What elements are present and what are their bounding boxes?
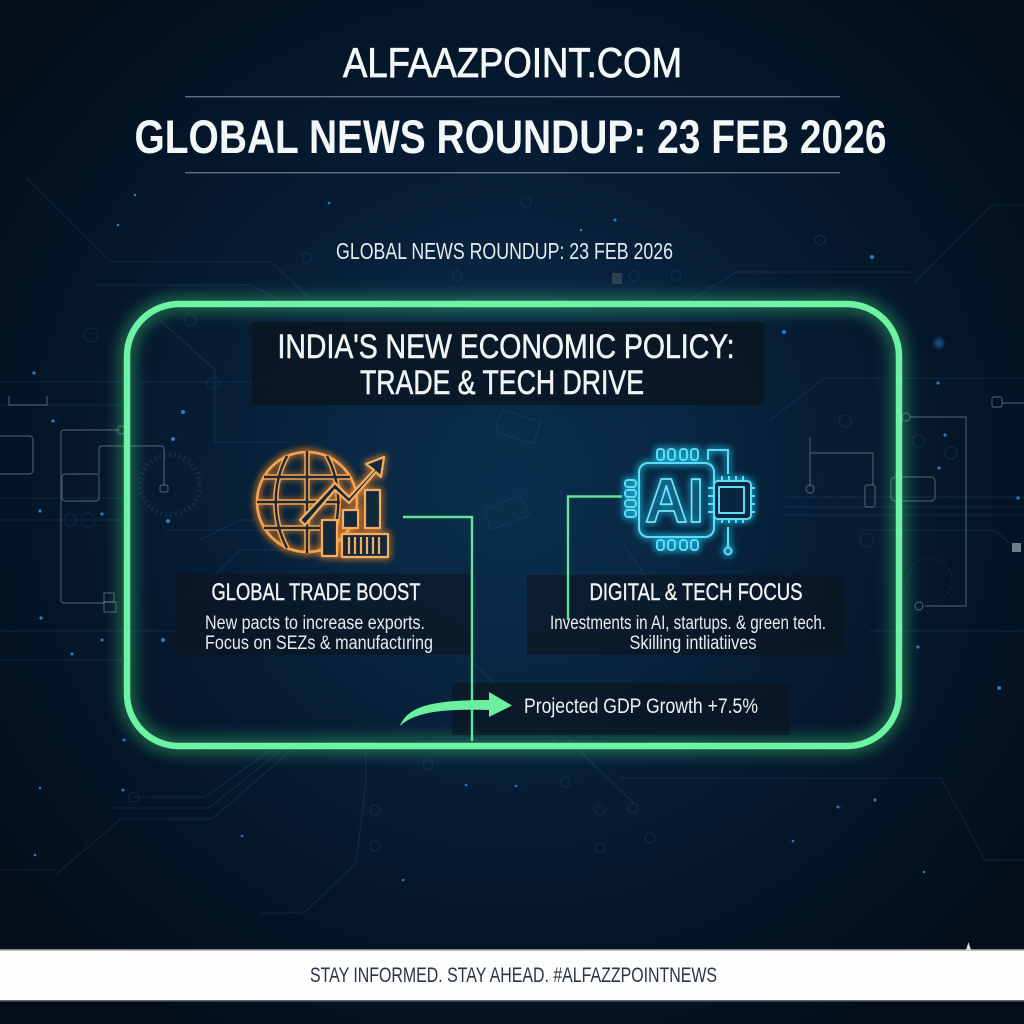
footer band: STAY INFORMED. STAY AHEAD. #ALFAZZPOINTNEWS (310, 964, 717, 987)
callout: projected GDP growth (452, 683, 790, 735)
panel heading: INDIA'S NEW ECONOMIC POLICY: (278, 328, 734, 366)
header rule bottom (185, 172, 840, 173)
icon: globe with rising arrow and bars (257, 451, 388, 557)
background glowing dots (32, 194, 1020, 881)
card: global trade boost: GLOBAL TRADE BOOST (212, 579, 421, 606)
footer marker (966, 942, 971, 950)
header: main title: GLOBAL NEWS ROUNDUP: 23 FEB 2026 (134, 110, 886, 163)
icon: AI chip: AI (645, 467, 704, 536)
header: site name: ALFAAZPOINT.COM (343, 39, 682, 86)
card: digital and tech focus: Investments in AI, startups. & green tech. (550, 613, 826, 634)
arrow: growth (400, 692, 512, 726)
connector: trade to growth (403, 517, 472, 741)
background grey circuit outlines (0, 396, 1024, 612)
connector: tech focus (568, 496, 622, 620)
subtitle: GLOBAL NEWS ROUNDUP: 23 FEB 2026 (336, 238, 673, 264)
panel heading: TRADE & TECH DRIVE (360, 364, 644, 402)
callout: projected GDP growth: Projected GDP Growth +7.5% (524, 695, 758, 718)
card: global trade boost: New pacts to increase exports. (205, 613, 425, 634)
icon: AI chip: AI (645, 467, 704, 536)
panel heading (252, 322, 764, 405)
card: global trade boost: Focus on SEZs & manufactıring (205, 633, 433, 654)
footer band (0, 949, 1024, 1002)
header rule top (185, 96, 840, 97)
background circuit traces (0, 177, 1024, 913)
icon: AI chip (625, 449, 755, 554)
panel border (127, 304, 899, 746)
panel border glow (127, 304, 899, 746)
card: digital and tech focus: DIGITAL & TECH FOCUS (590, 579, 802, 606)
panel: India's new economic policy (127, 304, 899, 746)
card: digital and tech focus: Skilling intliatiives (630, 633, 756, 654)
card: global trade boost (175, 574, 470, 655)
card: digital and tech focus (527, 575, 843, 655)
